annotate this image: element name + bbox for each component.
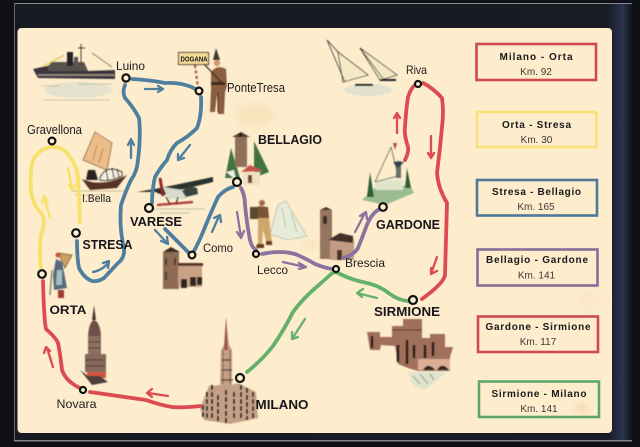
legend: Sirmione - Milano: Sirmione - Milano (492, 389, 586, 400)
legend: Stresa - Bellagio: Stresa - Bellagio (492, 187, 581, 198)
town labels: VARESE (130, 215, 182, 229)
map illustrations (33, 40, 453, 424)
icon: customs sign (178, 52, 208, 88)
icon: Bellagio tower and villa (225, 132, 269, 185)
legend: Gardone - Sirmione (478, 316, 598, 352)
town markers (38, 74, 421, 393)
legend: Milano - Orta (476, 44, 596, 80)
town labels: Luino (116, 59, 145, 73)
town labels: Brescia (345, 256, 385, 270)
town labels: Lecco (257, 263, 288, 277)
legend: Stresa - Bellagio (477, 180, 597, 216)
legend: Bellagio - Gardone (478, 250, 598, 286)
legend: Gardone - Sirmione: Km. 117 (520, 337, 557, 348)
legend: Stresa - Bellagio: Km. 165 (517, 202, 555, 213)
icon: steamer ship (33, 44, 115, 100)
icon: Riva sailboats (327, 40, 397, 96)
route map (31, 74, 447, 407)
legend: Orta - Stresa: Km. 30 (521, 135, 553, 146)
town labels: ORTA (50, 303, 87, 317)
town labels (27, 54, 440, 412)
legend: Milano - Orta: Km. 92 (520, 67, 552, 78)
town labels: Novara (56, 397, 97, 411)
icon: Milan cathedral (200, 317, 258, 424)
route: Milano to Orta (43, 281, 200, 407)
town labels: PonteTresa (227, 80, 286, 95)
route: Sirmione to Milano (247, 272, 408, 372)
town labels: DOGANA (180, 54, 208, 64)
icon: Sirmione castle (367, 319, 453, 390)
legend: Bellagio - Gardone: Bellagio - Gardone (486, 255, 588, 266)
town labels: GARDONE (376, 218, 440, 232)
route: Bellagio to Gardone (237, 188, 378, 269)
town labels: Como (203, 241, 233, 255)
icon: border guard (204, 48, 227, 114)
icon: Como tower and palace (163, 247, 203, 289)
town labels: Gravellona (27, 123, 82, 137)
legend: Gardone - Sirmione: Gardone - Sirmione (486, 322, 591, 333)
town labels: MILANO (256, 398, 309, 412)
town labels: BELLAGIO (258, 133, 322, 147)
icon: seaplane (137, 177, 213, 213)
panel: distance legend (476, 44, 599, 417)
route: Stresa to Bellagio (77, 79, 233, 281)
legend: Sirmione - Milano (479, 382, 599, 417)
town labels: STRESA (82, 238, 132, 252)
town labels: SIRMIONE (374, 305, 440, 319)
icon: Gardone villa and trees (362, 143, 414, 205)
town labels: I.Bella (82, 193, 112, 205)
legend: Orta - Stresa (477, 112, 596, 147)
route: Orta to Stresa (31, 147, 80, 268)
icon: Novara dome (80, 305, 108, 385)
town labels: Riva (406, 63, 427, 77)
legend: Bellagio - Gardone: Km. 141 (518, 270, 556, 282)
legend: Orta - Stresa: Orta - Stresa (502, 120, 571, 131)
legend: Milano - Orta: Milano - Orta (500, 52, 573, 63)
legend: Sirmione - Milano: Km. 141 (520, 404, 558, 415)
icon: hiker and mountain (250, 200, 307, 248)
route: Gardone to Sirmione (394, 83, 447, 299)
icon: Orta peasant woman (50, 252, 72, 298)
icon: Brescia church (320, 207, 354, 260)
icon: sailing boat (72, 132, 127, 195)
